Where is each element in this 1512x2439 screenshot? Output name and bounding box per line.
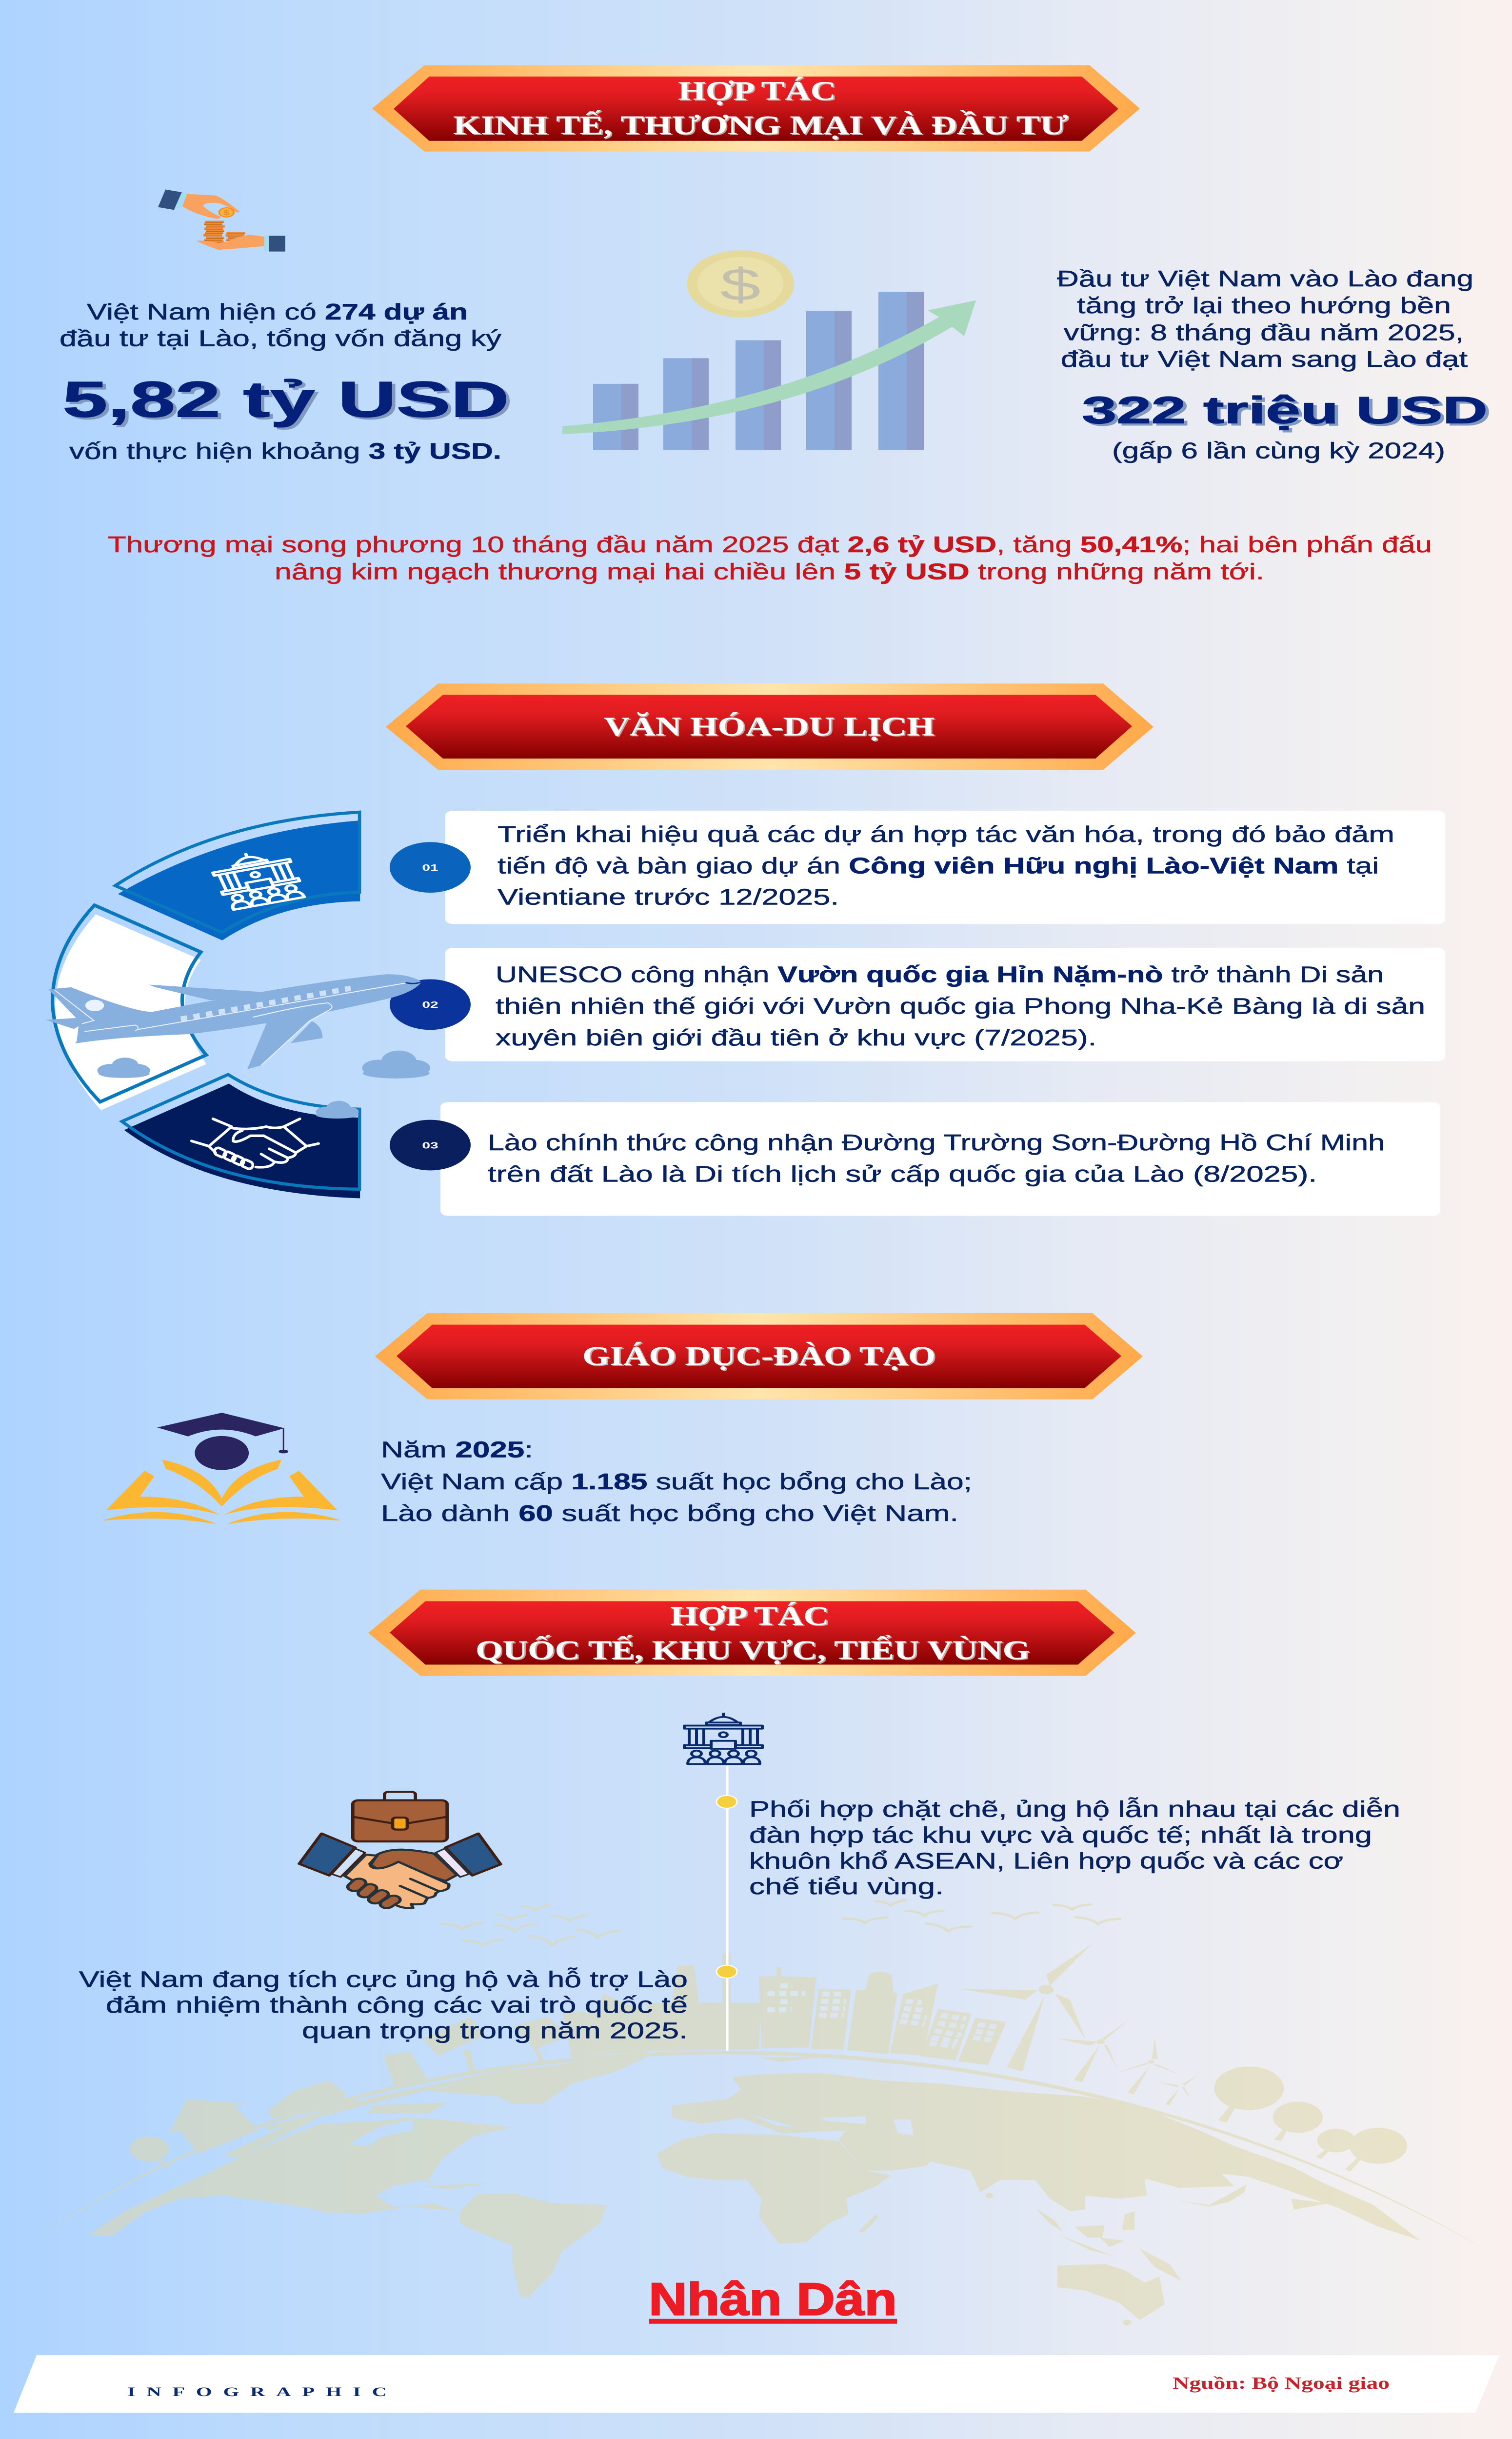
arrow <box>562 300 976 434</box>
text: international roles <box>79 1967 688 2043</box>
airplane and clouds <box>46 974 430 1119</box>
timeline <box>716 1766 737 2051</box>
coin <box>687 250 794 318</box>
birds <box>442 1900 1120 1945</box>
banner: văn hóa-du lịch: VĂN HÓA-DU LỊCH <box>604 712 935 741</box>
card 02: UNESCO công nhận Vườn quốc gia Hỉn Nặm-nò trở thành Di sản <box>496 962 1384 987</box>
skyline <box>759 1967 1006 2065</box>
icon: white handshake <box>192 1119 318 1170</box>
banner: hợp tác kinh tế, thương mại và đầu tư: HỢP TÁC <box>678 76 836 105</box>
text: international roles: đảm nhiệm thành công các vai trò quốc tế <box>106 1993 688 2018</box>
eastern hemisphere land <box>657 1944 1421 2325</box>
text: regional cooperation: chế tiểu vùng. <box>749 1874 944 1899</box>
dark hand <box>371 1850 457 1881</box>
text: investment right: (gấp 6 lần cùng kỳ 2024) <box>1112 438 1445 463</box>
icon: graduate and book <box>104 1413 339 1524</box>
text: investment left: vốn thực hiện khoảng 3 tỷ USD. <box>69 439 501 464</box>
text: investment left <box>60 300 509 464</box>
text: regional cooperation: khuôn khổ ASEAN, Liên hợp quốc và các cơ <box>749 1848 1343 1874</box>
text: scholarships: Năm 2025: <box>381 1437 533 1462</box>
card 03 <box>440 1102 1440 1216</box>
cloud right <box>362 1051 430 1079</box>
text: investment right: tăng trở lại theo hướng bền <box>1077 293 1451 318</box>
card 02 <box>445 948 1445 1061</box>
text: regional cooperation: Phối hợp chặt chẽ, ủng hộ lẫn nhau tại các diễn <box>749 1797 1400 1822</box>
icon: briefcase and handshake <box>299 1792 501 1910</box>
banner: hợp tác quốc tế, khu vực, tiểu vùng: QUỐC TẾ, KHU VỰC, TIỂU VÙNG <box>476 1635 1030 1665</box>
card 01: Vientiane trước 12/2025. <box>497 884 839 910</box>
briefcase <box>353 1792 447 1841</box>
sleeves and cuffs <box>299 1834 355 1876</box>
wind turbines <box>960 1944 1198 2105</box>
chart: growth bars, coin and arrow <box>562 250 976 450</box>
horizon arc <box>35 2051 1488 2251</box>
banner: giáo dục-đào tạo <box>375 1313 1143 1399</box>
icon: navy monument <box>684 1713 762 1764</box>
dot 1 <box>716 1796 737 1808</box>
card 01: tiến độ và bàn giao dự án Công viên Hữu nghị Lào-Việt Nam tại <box>497 853 1379 879</box>
badge 02: 02 <box>422 1000 438 1010</box>
icon: white monument <box>207 846 307 910</box>
text: international roles: Việt Nam đang tích cực ủng hộ và hỗ trợ Lào <box>79 1967 688 1992</box>
text: regional cooperation <box>749 1797 1400 1899</box>
card 02: xuyên biên giới đầu tiên ở khu vực (7/2025). <box>496 1025 1096 1051</box>
logo: Nhân Dân: Nhân Dân <box>649 2274 897 2325</box>
banner: hợp tác kinh tế, thương mại và đầu tư <box>372 65 1140 152</box>
banner: hợp tác quốc tế, khu vực, tiểu vùng <box>368 1590 1136 1676</box>
banner: giáo dục-đào tạo: GIÁO DỤC-ĐÀO TẠO <box>582 1341 935 1371</box>
text: scholarships: Lào dành 60 suất học bổng cho Việt Nam. <box>381 1501 958 1526</box>
badge 03 <box>390 1120 471 1170</box>
segment 3 navy <box>122 1075 360 1199</box>
coin: $ <box>720 259 761 310</box>
text: investment left: 5,82 tỷ USD <box>62 371 509 428</box>
background world map watermark <box>35 1900 1488 2325</box>
house, car, charger, panels, factory <box>169 1953 761 2154</box>
dot 2 <box>716 1965 737 1978</box>
text: regional cooperation: đàn hợp tác khu vực và quốc tế; nhất là trong <box>749 1822 1372 1848</box>
cloud left <box>98 1058 150 1078</box>
card 03: trên đất Lào là Di tích lịch sử cấp quốc gia của Lào (8/2025). <box>488 1161 1317 1187</box>
cloud on navy segment <box>316 1101 358 1119</box>
icon: hands and coins <box>158 190 285 252</box>
footer band <box>14 2355 1499 2413</box>
banner: hợp tác kinh tế, thương mại và đầu tư: KINH TẾ, THƯƠNG MẠI VÀ ĐẦU TƯ <box>453 110 1068 140</box>
text: investment right: 322 triệu USD <box>1082 389 1488 431</box>
text: scholarships: Việt Nam cấp 1.185 suất học bổng cho Lào; <box>381 1469 972 1495</box>
text: scholarships <box>381 1437 972 1526</box>
card 01 <box>445 811 1445 924</box>
skyline windows <box>767 1986 1000 2046</box>
bars <box>593 292 924 450</box>
text: investment left: Việt Nam hiện có 274 dự án <box>87 300 468 324</box>
source: Nguồn: Bộ Ngoại giao <box>1173 2374 1390 2393</box>
banner: văn hóa-du lịch <box>386 683 1154 770</box>
segment 2 white <box>52 905 206 1110</box>
text: investment left: đầu tư tại Lào, tổng vốn đăng ký <box>60 326 501 351</box>
text: bilateral trade: Thương mại song phương 10 tháng đầu năm 2025 đạt 2,6 tỷ USD, tăng 50,41%; hai bên phấn đấu <box>108 532 1432 557</box>
badge 03: 03 <box>422 1140 438 1151</box>
text: bilateral trade: nâng kim ngạch thương mại hai chiều lên 5 tỷ USD trong những năm tới. <box>275 559 1264 584</box>
text: bilateral trade <box>108 532 1432 584</box>
western hemisphere land <box>90 1953 761 2298</box>
light hand <box>345 1855 449 1908</box>
segment 1 blue <box>115 812 360 940</box>
text: investment right <box>1057 266 1488 463</box>
badge 02 <box>390 980 471 1030</box>
banner: hợp tác quốc tế, khu vực, tiểu vùng: HỢP TÁC <box>670 1601 829 1631</box>
text: international roles: quan trọng trong năm 2025. <box>302 2019 688 2043</box>
badge 01 <box>390 842 471 893</box>
label: infographic: INFOGRAPHIC <box>127 2385 387 2399</box>
fingers <box>345 1877 403 1910</box>
arc diagram segments <box>52 812 360 1199</box>
trees <box>1214 2066 1284 2110</box>
icon: hands and coins: $ <box>223 209 230 217</box>
badge 01: 01 <box>422 863 438 873</box>
plane <box>46 974 421 1069</box>
